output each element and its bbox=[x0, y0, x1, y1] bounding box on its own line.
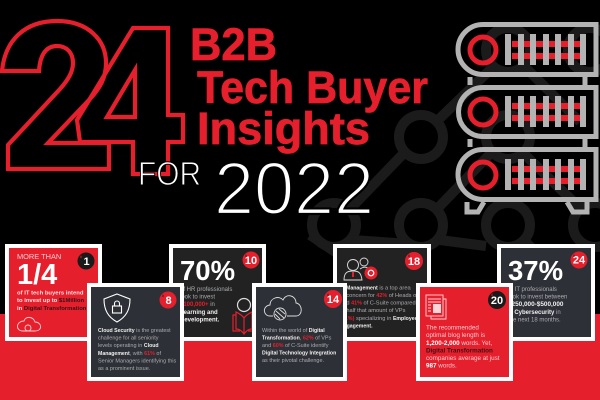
background: network pattern bbox=[310, 28, 600, 332]
background: red lower band bbox=[0, 314, 600, 400]
card 8: cloud security: challenge for all seniority bbox=[98, 336, 159, 342]
card 20: blog length: The recommended bbox=[426, 324, 479, 332]
card 10: 70 percent: Development. bbox=[180, 318, 220, 324]
card 24: 37 percent: 37% bbox=[508, 255, 563, 286]
badge: number 14 bbox=[324, 290, 342, 308]
card 18: IT management: (21%) specializing in Employee bbox=[340, 316, 418, 322]
card 14: digital transformation: Within the world of Digital bbox=[262, 328, 325, 334]
card 24: 37 percent: $250,000-$500,000 bbox=[508, 301, 564, 308]
card 18: IT management: to half that amount of VPs bbox=[340, 308, 406, 314]
title: B2B Tech Buyer Insights bbox=[190, 19, 428, 154]
card 1: one quarter: 1/4 bbox=[17, 259, 57, 291]
card 14: digital transformation bbox=[254, 285, 345, 379]
icon: cloud with globe bbox=[264, 296, 301, 320]
card 18: IT management: IT Management is a top area bbox=[340, 286, 411, 292]
badge: number 14: # bbox=[327, 292, 330, 297]
card 8: cloud security: Cloud Security is the greatest bbox=[98, 328, 171, 334]
title: B2B Tech Buyer Insights: Tech Buyer bbox=[197, 62, 428, 113]
card 1: one quarter bbox=[7, 246, 100, 339]
card 14: digital transformation: as their pivotal challenge. bbox=[262, 358, 325, 364]
badge: number 18 bbox=[405, 252, 423, 270]
badge: number 18: 18 bbox=[408, 256, 420, 268]
badge: number 8: 8 bbox=[165, 295, 172, 307]
server unit 1 bbox=[458, 24, 596, 74]
icon: cloud bbox=[17, 317, 41, 331]
card 20: blog length: 1,200-2,000 words. Yet, bbox=[426, 340, 492, 347]
card 8: cloud security: as a prominent issue. bbox=[98, 366, 151, 372]
card 24: 37 percent: of IT professionals bbox=[508, 287, 557, 293]
card 14: digital transformation: Transformation, 62% of VPs bbox=[262, 336, 332, 342]
card 1: one quarter: of IT tech buyers intend bbox=[17, 290, 84, 296]
badge: number 20: 20 bbox=[491, 295, 503, 307]
server unit 2 bbox=[459, 88, 596, 136]
card 20: blog length: 987 words. bbox=[426, 362, 457, 370]
card 14: digital transformation: and 60% of C-Suite identify bbox=[262, 343, 329, 349]
card 1: one quarter: to invest up to $1Million bbox=[17, 298, 84, 304]
card 24: 37 percent: look to invest between bbox=[508, 294, 567, 300]
card 20: blog length: Digital Transformation bbox=[426, 348, 493, 354]
icon: document pages bbox=[426, 295, 446, 319]
badge: number 24: # bbox=[573, 253, 576, 258]
title: B2B Tech Buyer Insights: B2B bbox=[190, 19, 277, 70]
badge: number 1: 1 bbox=[83, 256, 90, 268]
card 18: IT management: of concern for 42% of Heads of bbox=[340, 293, 418, 299]
badge: number 24: 24 bbox=[573, 254, 586, 266]
card 20: blog length bbox=[418, 285, 511, 379]
card 20: blog length: optimal blog length is bbox=[426, 332, 485, 339]
badge: number 24 bbox=[570, 252, 588, 268]
card 8: cloud security: Management, with 61% of bbox=[98, 351, 161, 357]
card 10: 70 percent: Learning and bbox=[180, 310, 218, 316]
card 10: 70 percent: look to invest bbox=[180, 294, 215, 300]
card 10: 70 percent bbox=[171, 246, 264, 339]
card 8: cloud security bbox=[89, 285, 182, 379]
card 24: 37 percent bbox=[499, 246, 593, 339]
badge: number 8 bbox=[160, 292, 176, 308]
icon: person reading book bbox=[233, 298, 256, 334]
card 10: 70 percent: 70% bbox=[180, 255, 235, 286]
card 1: one quarter: MORE THAN bbox=[17, 252, 61, 261]
card 24: 37 percent: the next 18 months. bbox=[508, 318, 561, 324]
icon: server rack bbox=[458, 24, 596, 212]
badge: number 18: # bbox=[408, 253, 411, 258]
badge: number 10: # bbox=[245, 253, 248, 258]
icon: shield with padlock bbox=[104, 294, 130, 322]
card 20: blog length: companies average at just bbox=[426, 355, 500, 362]
server unit 3 bbox=[458, 150, 596, 200]
badge: number 8: # bbox=[162, 293, 165, 298]
big outlined number 24 bbox=[2, 21, 183, 174]
rack connectors and feet bbox=[467, 77, 587, 212]
badge: number 1: # bbox=[80, 254, 83, 259]
card 10: 70 percent: $100,000+ in bbox=[180, 302, 215, 308]
badge: number 1 bbox=[78, 252, 94, 270]
title: FOR 2022: FOR bbox=[138, 155, 201, 192]
card 18: IT management: Engagement. bbox=[340, 324, 373, 330]
card 18: IT management: and 41% of C-Suite compared bbox=[340, 300, 416, 306]
card 8: cloud security: Senior Managers identifying this bbox=[98, 358, 177, 364]
badge: number 20 bbox=[488, 291, 506, 309]
badge: number 10 bbox=[242, 252, 260, 268]
card 18: IT management bbox=[335, 246, 429, 339]
title: FOR 2022: 2022 bbox=[214, 147, 374, 230]
card 24: 37 percent: in Cybersecurity in bbox=[508, 310, 561, 316]
title: B2B Tech Buyer Insights: Insights bbox=[197, 103, 370, 154]
card 14: digital transformation: Digital Technology Integration bbox=[262, 350, 336, 356]
card 10: 70 percent: of HR professionals bbox=[180, 287, 232, 293]
card 8: cloud security: levels operating in Cloud bbox=[98, 343, 159, 349]
badge: number 14: 14 bbox=[327, 294, 340, 306]
title: FOR 2022 bbox=[138, 147, 374, 230]
badge: number 10: 10 bbox=[245, 255, 257, 267]
icon: people with gear bbox=[344, 258, 378, 280]
card 1: one quarter: in Digital Transformation bbox=[17, 306, 87, 312]
badge: number 20: # bbox=[491, 292, 494, 297]
